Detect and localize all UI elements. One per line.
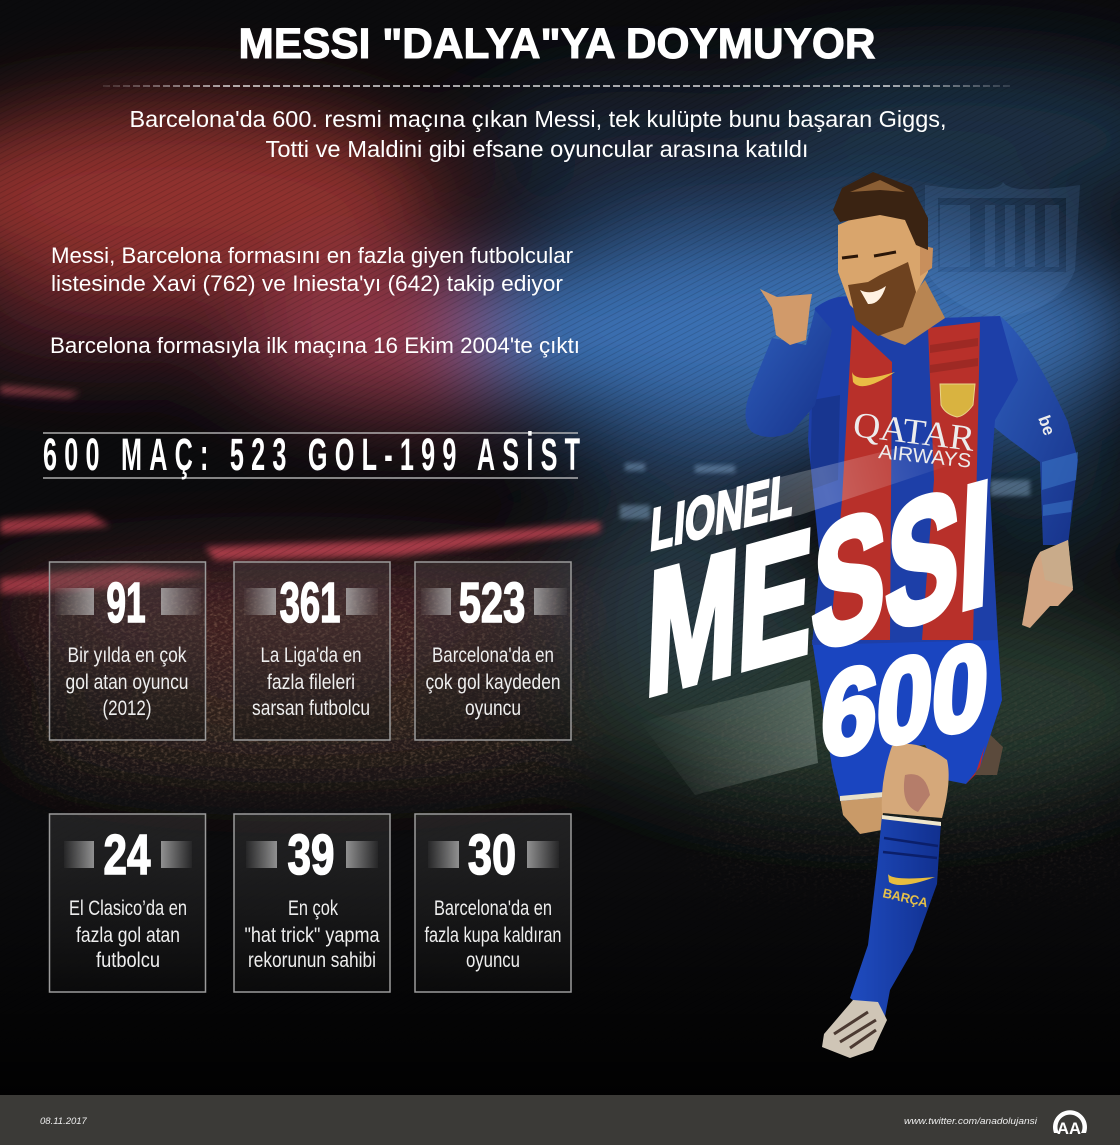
beard: [848, 262, 916, 336]
illustration: football player: [745, 172, 1078, 1058]
panel: stat 39: 39: [288, 823, 334, 887]
sock text: BARÇA: [881, 885, 930, 910]
footer link: www.twitter.com/anadolujansi: [904, 1116, 1038, 1127]
icon: agency logo: [1053, 1110, 1087, 1138]
subtitle: Totti ve Maldini gibi efsane oyuncular arasına katıldı: [266, 136, 808, 162]
panel: stat 39: [234, 814, 390, 992]
bandaged hand: [1022, 540, 1073, 628]
text block: career facts: [50, 243, 580, 358]
text block: career facts: Messi, Barcelona formasını en fazla giyen futbolcular: [51, 243, 573, 268]
text block: career facts: listesinde Xavi (762) ve Iniesta'yı (642) takip ediyor: [51, 271, 563, 296]
jersey sponsor: [851, 404, 1059, 473]
ear: [920, 245, 933, 276]
divider dashed line: [103, 85, 1012, 87]
panel: stat 361: La Liga'da en: [260, 643, 362, 667]
panel: stat 30: [415, 814, 571, 992]
panel: stat 361: sarsan futbolcu: [252, 696, 370, 720]
name text: 600: 600: [817, 616, 993, 784]
footer: [0, 1095, 1120, 1145]
panel: stat 24: El Clasico’da en: [69, 896, 187, 920]
panel: stat 361: 361: [280, 572, 340, 635]
name text: Lionel: LIONEL: [648, 460, 796, 564]
jersey sponsor: be: [1034, 413, 1059, 438]
jersey sponsor: QATAR: [851, 404, 977, 459]
footer date: 08.11.2017: [40, 1116, 88, 1127]
jersey red stripe right: [922, 322, 980, 640]
text block: career facts: Barcelona formasıyla ilk maçına 16 Ekim 2004'te çıktı: [50, 333, 580, 358]
neck: [880, 280, 945, 345]
jersey swoosh: [852, 372, 895, 386]
panel: stat 39: rekorunun sahibi: [248, 948, 376, 972]
sock swoosh: [888, 874, 935, 885]
stadium lights: [620, 463, 1030, 519]
panel: stat 24: [50, 814, 206, 992]
icon: agency logo: AA: [1057, 1119, 1081, 1138]
panel: stat 91: [50, 562, 206, 740]
shorts: [812, 640, 1002, 801]
back foot: [975, 728, 1003, 775]
panel: stat 523: oyuncu: [465, 696, 521, 720]
jersey sponsor: AIRWAYS: [877, 441, 972, 473]
far arm sleeve: [985, 316, 1078, 545]
jersey crest: [940, 384, 975, 417]
subtitle: [130, 106, 946, 162]
heading: 600 matches: 600 MAÇ: 523 GOL-199 ASİST: [43, 429, 580, 480]
panel: stat 30: Barcelona'da en: [434, 896, 552, 920]
panel: stat 523: çok gol kaydeden: [426, 670, 560, 694]
swoosh band below name: [640, 680, 818, 795]
pointing arm sleeve: [745, 310, 832, 437]
panel: stat 24: 24: [104, 823, 151, 887]
title: MESSI "DALYA"YA DOYMUYOR: [238, 20, 876, 68]
panel: stat 91: Bir yılda en çok: [68, 643, 187, 667]
jersey shading: [810, 338, 978, 490]
panel: stat 39: En çok: [288, 896, 338, 920]
panel: stat 361: fazla fileleri: [267, 670, 355, 694]
icon: faint club crest: [925, 182, 1080, 318]
panel: stat 30: 30: [468, 822, 516, 886]
panel: stat 523: Barcelona'da en: [432, 643, 554, 667]
eyes: [842, 252, 896, 258]
subtitle: Barcelona'da 600. resmi maçına çıkan Messi, tek kulüpte bunu başaran Giggs,: [130, 106, 946, 132]
boot: [822, 1000, 887, 1058]
panel: stat 523: 523: [459, 571, 525, 635]
face: [838, 205, 928, 335]
hair: [833, 172, 928, 250]
panel: stat 523: [415, 562, 571, 740]
jersey torso: [808, 296, 1018, 645]
red streaks: [0, 385, 600, 594]
panel: stat 30: fazla kupa kaldıran: [424, 923, 562, 947]
panel: stat 361: [234, 562, 390, 740]
pointing hand: [760, 289, 812, 345]
panel: stat 24: fazla gol atan: [76, 923, 180, 947]
swoosh band behind name: [690, 440, 950, 540]
panel: stat 30: oyuncu: [466, 948, 520, 972]
panel: stat 91: 91: [106, 572, 146, 635]
panel: stat 39: "hat trick" yapma: [244, 923, 380, 947]
panel: stat 24: futbolcu: [96, 948, 160, 972]
panel: stat 91: gol atan oyuncu: [66, 670, 188, 694]
grass grain texture: [4, 566, 596, 810]
sock: [850, 815, 941, 1022]
back leg: [840, 795, 884, 834]
panel: stat 91: (2012): [102, 696, 152, 720]
jersey red stripe left: [830, 325, 892, 640]
front thigh: [882, 744, 949, 818]
